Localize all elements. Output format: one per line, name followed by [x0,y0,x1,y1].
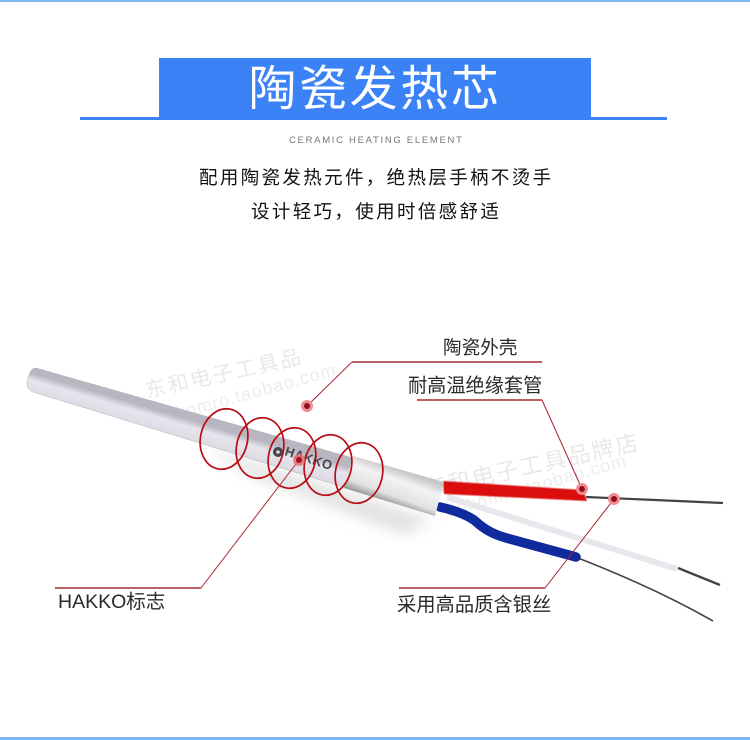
white sleeve [447,497,720,585]
watermark: dokomro.taobao.com [153,360,338,429]
tube shadow [200,445,432,535]
callout dots [293,400,620,505]
title banner: 陶瓷发热芯 [248,63,502,116]
title banner [159,58,591,120]
HAKKO logo: HAKKO [283,444,334,473]
heading underline bar [80,117,667,120]
subtitle: CERAMIC HEATING ELEMENT [289,135,464,146]
bottom border line [0,737,750,740]
blue sleeve [440,507,713,621]
ceramic tube [27,368,444,516]
label: silver wire: 采用高品质含银丝 [397,595,551,616]
red sleeve [443,481,723,503]
description line 2: 设计轻巧，使用时倍感舒适 [251,201,501,222]
label: insulation sleeve: 耐高温绝缘套管 [408,376,542,397]
description line 1: 配用陶瓷发热元件，绝热层手柄不烫手 [199,167,553,188]
watermark: 东和电子工具品 [143,346,305,403]
label: HAKKO logo: HAKKO标志 [58,591,165,613]
callout underlines [55,361,545,589]
sleeve wire [678,568,720,585]
heating coil rings [195,404,388,508]
watermark: dokomro.taobao.com [444,450,629,521]
top border line [0,0,750,2]
callout lines [201,362,614,588]
watermark: 东和电子工具品牌店 [422,430,642,502]
label: ceramic shell: 陶瓷外壳 [443,337,517,358]
